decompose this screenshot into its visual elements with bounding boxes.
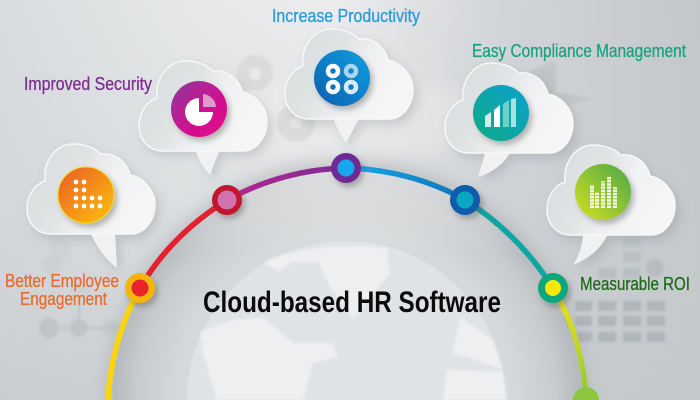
arc: purple segment: [227, 168, 346, 200]
icon: four rings: [314, 50, 370, 106]
cloud: security: [139, 61, 267, 175]
cloud: compliance: [445, 63, 573, 177]
label: Better Employee Engagement: Engagement: [20, 289, 107, 309]
icon: pie chart: [171, 81, 227, 137]
node: compliance: [450, 185, 480, 215]
arc: yellow segment: [108, 288, 140, 400]
node: bottom lime: [573, 387, 599, 400]
arc: teal segment: [465, 200, 553, 288]
icon: dotted bars: [575, 164, 631, 220]
icon: dot chart: [58, 167, 114, 223]
node: ROI: [538, 273, 568, 303]
background motif: pie: [522, 60, 592, 110]
title: Cloud-based HR Software: [203, 286, 501, 319]
node: engagement: [125, 273, 155, 303]
cloud: productivity: [285, 29, 413, 143]
label: Better Employee Engagement: Better Employee: [5, 271, 119, 291]
arc: lime segment: [553, 288, 586, 400]
background motif: gears: [237, 55, 315, 142]
background motif: bar grid: [552, 238, 665, 342]
background motif: hexagon nodes: [39, 239, 118, 338]
label: Increase Productivity: Increase Productivity: [272, 6, 420, 26]
globe: [187, 241, 507, 400]
label: Better Employee Engagement: [5, 271, 119, 309]
cloud: ROI: [547, 145, 675, 265]
node: security: [212, 185, 242, 215]
icon: rising bars: [473, 85, 529, 141]
label: Improved Security: Improved Security: [24, 74, 152, 94]
arc: blue segment: [346, 168, 465, 200]
arc: red segment: [140, 200, 227, 288]
node: productivity: [331, 153, 361, 183]
cloud: engagement: [27, 144, 155, 268]
continents: [200, 246, 507, 400]
dome behind arc: [106, 160, 586, 400]
